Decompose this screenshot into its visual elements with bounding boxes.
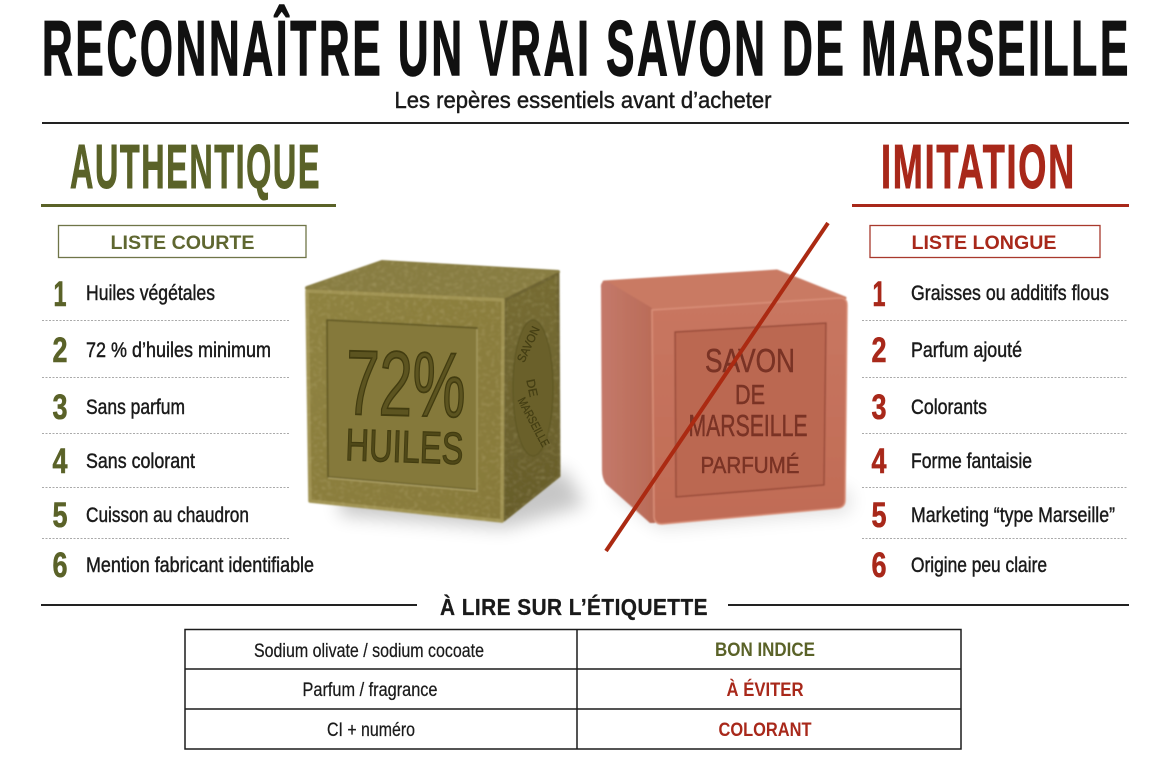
list: authentique: 72 % d’huiles minimum	[86, 339, 271, 362]
list: authentique: 3	[52, 388, 68, 427]
soap text: savon: SAVON	[705, 342, 795, 379]
list: authentique: 6	[52, 546, 68, 585]
list: imitation: Marketing “type Marseille”	[911, 504, 1115, 527]
row: sodium olivate	[254, 640, 815, 662]
table: label terms	[185, 629, 961, 749]
row: sodium olivate: BON INDICE	[715, 640, 815, 661]
list: imitation: Forme fantaisie	[911, 450, 1032, 473]
badge: liste longue	[870, 226, 1100, 258]
row: ci numéro	[327, 720, 812, 741]
soap side stamp: SAVON	[514, 324, 543, 364]
strike-through line	[606, 223, 828, 551]
list: imitation: Colorants	[911, 396, 987, 419]
soap text: de: DE	[735, 379, 765, 410]
subtitle: Les repères essentiels avant d’acheter	[394, 87, 772, 113]
list: authentique: 4	[52, 442, 68, 481]
soap side stamp	[514, 324, 552, 449]
list: imitation: 2	[872, 331, 886, 370]
list: authentique: 2	[52, 331, 68, 370]
list: imitation: Graisses ou additifs flous	[911, 282, 1109, 305]
section heading: à lire sur l'étiquette: À LIRE SUR L’ÉTIQUETTE	[440, 593, 708, 620]
soap text: huiles: HUILES	[345, 419, 464, 474]
list: authentique: Sans parfum	[86, 396, 185, 419]
list: authentique: Huiles végétales	[86, 282, 215, 305]
row: sodium olivate: Sodium olivate / sodium cocoate	[254, 641, 484, 662]
soap text: 72%: 72%	[344, 332, 467, 437]
list: imitation: 4	[872, 442, 887, 481]
list: imitation: Parfum ajouté	[911, 339, 1022, 362]
soap: authentic olive cube	[305, 260, 585, 528]
list: authentique: Mention fabricant identifiable	[86, 554, 314, 577]
badge: liste courte	[58, 226, 306, 258]
badge: liste courte: LISTE COURTE	[110, 233, 254, 254]
soap side stamp: DE	[523, 378, 541, 398]
list: authentique: Cuisson au chaudron	[86, 504, 249, 527]
list: imitation: 3	[872, 388, 886, 427]
list: authentique: 1	[54, 275, 66, 314]
list: imitation: 5	[872, 496, 886, 535]
soap: imitation red cube	[601, 271, 850, 528]
panel: imitation	[852, 133, 1129, 585]
list: authentique: 5	[52, 496, 68, 535]
row: ci numéro: COLORANT	[718, 720, 812, 741]
badge: liste longue: LISTE LONGUE	[912, 233, 1056, 254]
row: parfum	[302, 679, 804, 701]
list: imitation: 6	[872, 546, 886, 585]
panel: authentique	[41, 133, 336, 585]
soap text: parfumé: PARFUMÉ	[700, 452, 800, 478]
list: authentique	[42, 275, 314, 585]
heading: authentique: AUTHENTIQUE	[70, 133, 321, 202]
row: ci numéro: CI + numéro	[327, 720, 415, 741]
row: parfum: Parfum / fragrance	[302, 680, 438, 701]
soap text: marseille: MARSEILLE	[688, 408, 808, 443]
list: authentique: Sans colorant	[86, 450, 195, 473]
row: parfum: À ÉVITER	[726, 679, 804, 701]
list: imitation: Origine peu claire	[911, 554, 1047, 577]
soap side stamp: MARSEILLE	[515, 395, 552, 449]
list: imitation: 1	[872, 275, 886, 314]
list: imitation	[862, 275, 1128, 585]
